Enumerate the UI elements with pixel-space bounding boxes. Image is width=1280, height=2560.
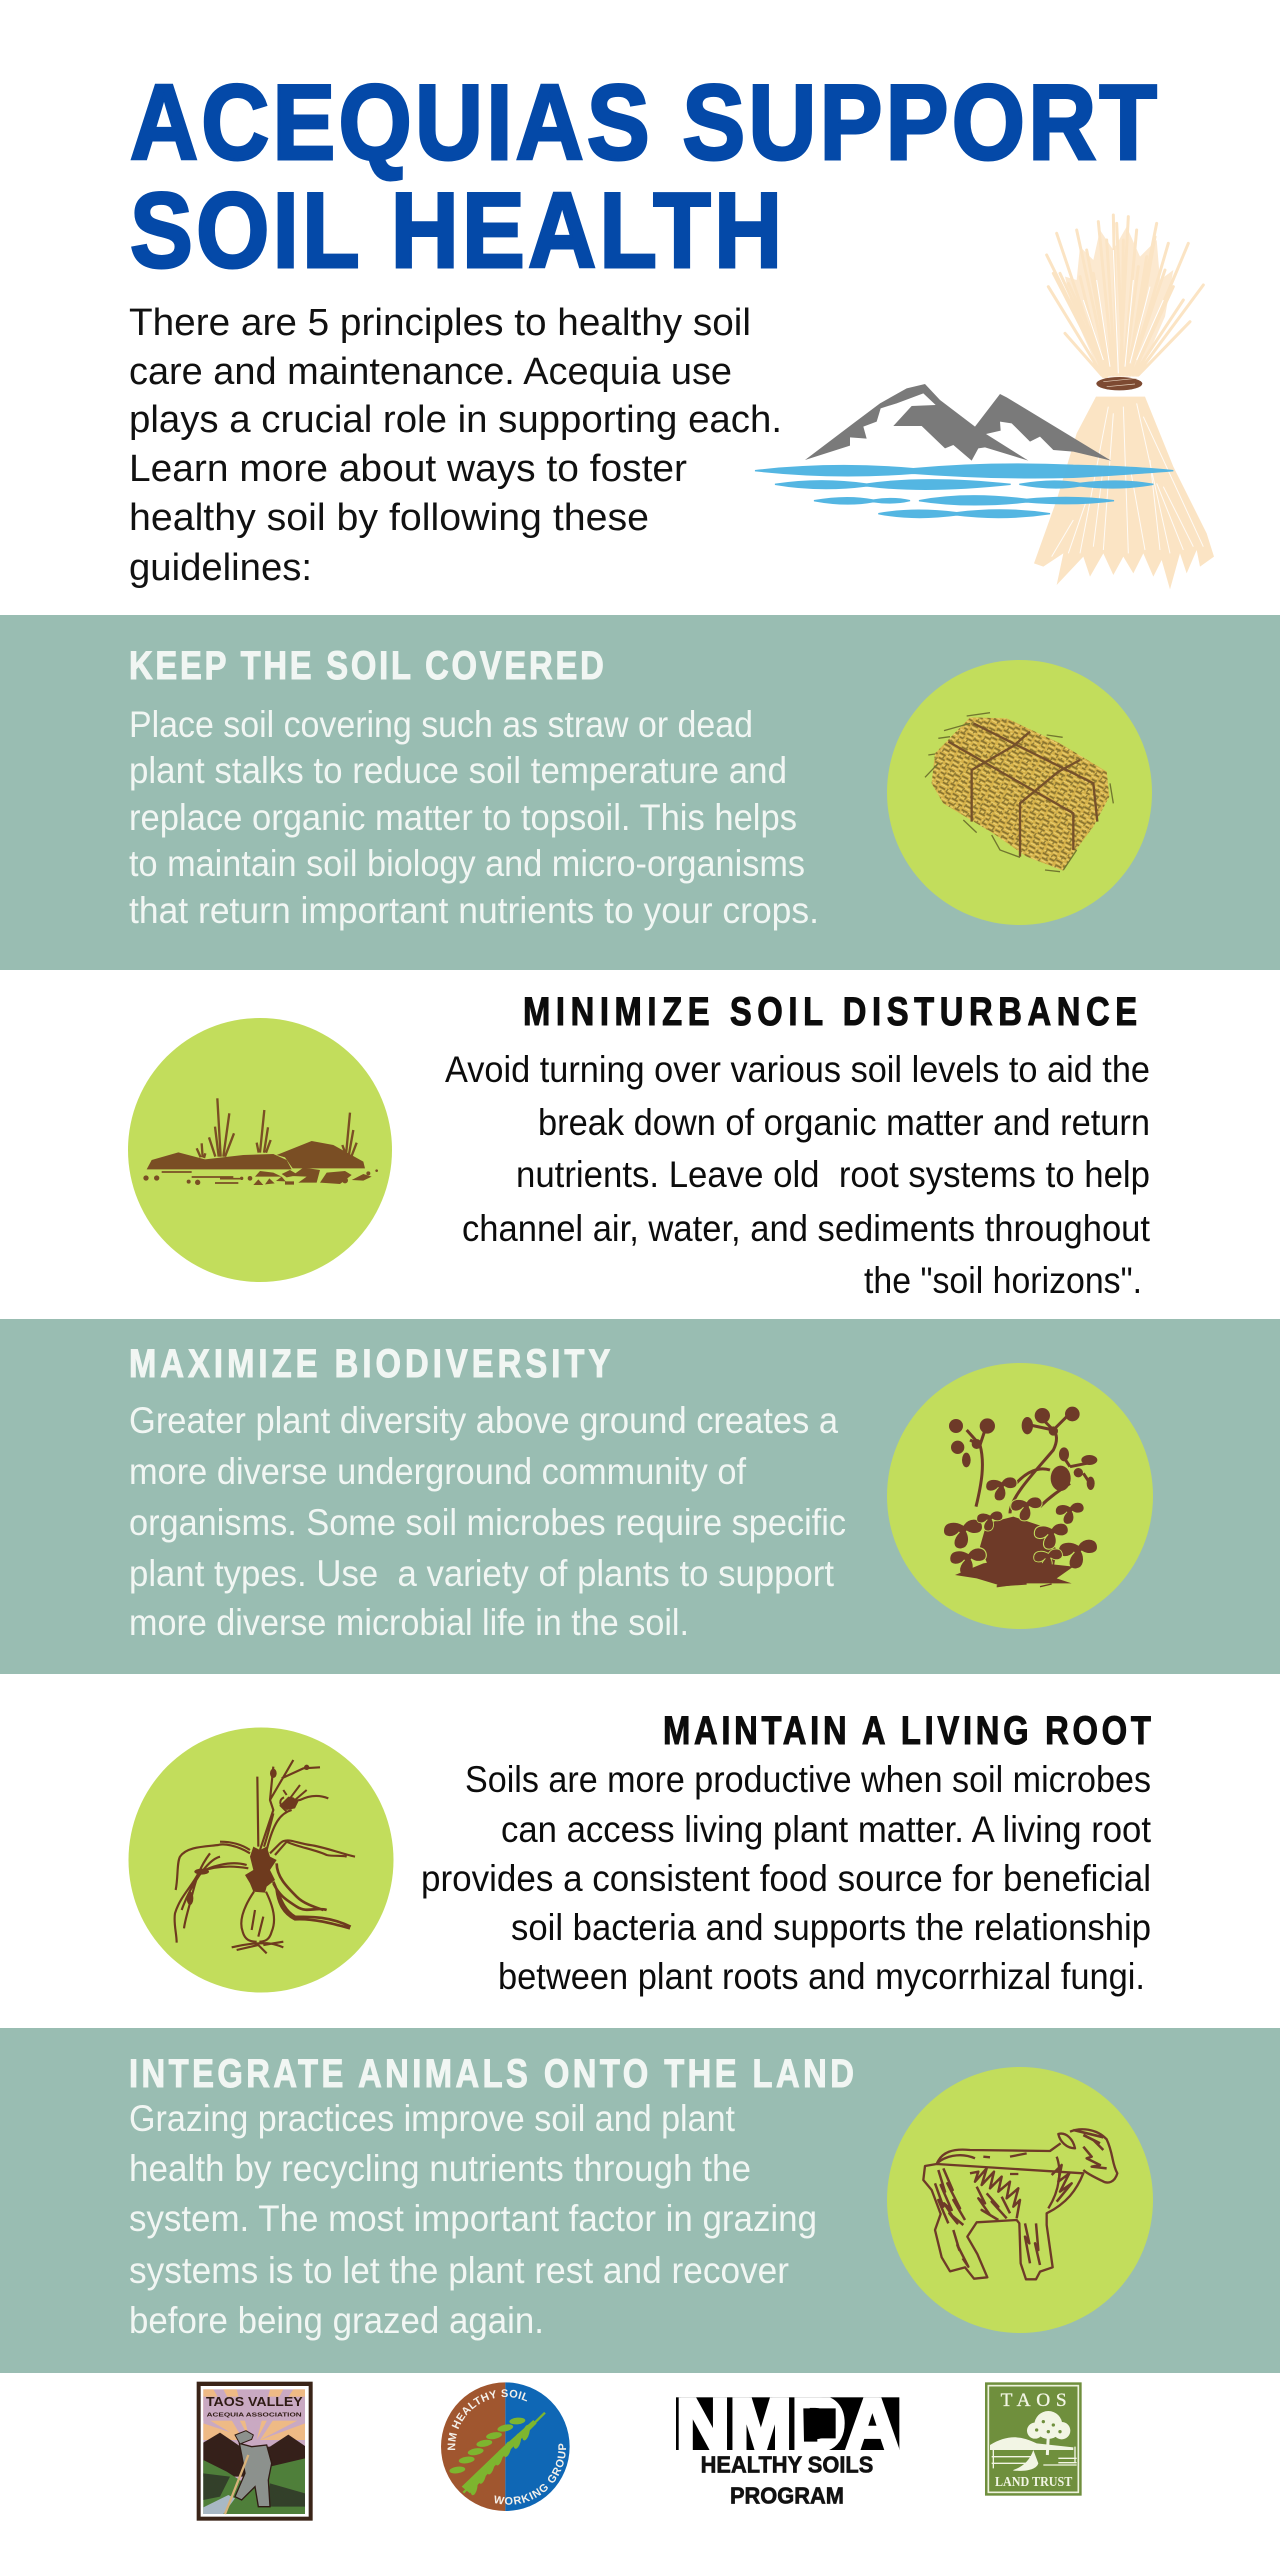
body text: the "soil horizons". [864,1260,1142,1301]
panel: keep the soil covered [0,615,1280,970]
logo: NMDA Healthy Soils Program: NMDA [676,2382,899,2467]
intro text: guidelines: [129,547,312,589]
body text: organisms. Some soil microbes require specific [129,1502,846,1543]
logo: Taos Valley Acequia Association: TAOS VALLEY [206,2394,303,2409]
panel: integrate animals onto the land [0,2028,1280,2373]
body text [129,2098,817,2341]
intro text: Learn more about ways to foster [129,448,687,490]
logo: NMDA Healthy Soils Program: PROGRAM [730,2482,844,2508]
body text: that return important nutrients to your crops. [129,890,819,931]
intro text [129,302,782,589]
icon: mountains [805,384,1111,461]
body text: health by recycling nutrients through the [129,2148,751,2189]
heading: KEEP THE SOIL COVERED [129,643,604,688]
body text: systems is to let the plant rest and recover [129,2250,789,2291]
body text: Avoid turning over various soil levels to aid the [445,1049,1150,1090]
icon: wheat sheaf [1034,215,1214,589]
body text: replace organic matter to topsoil. This helps [129,797,797,838]
body text: plant stalks to reduce soil temperature and [129,750,787,791]
icon: plant with root [128,1728,394,1992]
body text: Soils are more productive when soil microbes [465,1759,1151,1800]
heading: MINIMIZE SOIL DISTURBANCE [523,989,1137,1034]
icon: hay bale [887,660,1152,925]
body text: Grazing practices improve soil and plant [129,2098,736,2139]
panel: maintain a living root [0,1674,1280,2028]
heading: MAINTAIN A LIVING ROOT [663,1708,1151,1753]
logo: Taos Valley Acequia Association: ACEQUIA ASSOCIATION [207,2413,302,2419]
icon: sheep [887,2067,1153,2333]
body text: break down of organic matter and return [538,1102,1150,1143]
body text: system. The most important factor in grazing [129,2198,817,2239]
logo: Taos Valley Acequia Association [197,2382,313,2521]
body text: channel air, water, and sediments throughout [462,1208,1151,1249]
title: SOIL HEALTH [130,171,782,290]
intro text: care and maintenance. Acequia use [129,351,732,393]
body text: Place soil covering such as straw or dead [129,704,753,745]
illustration: wheat bundle, mountains and water [755,215,1214,589]
body text: before being grazed again. [129,2300,544,2341]
body text: can access living plant matter. A living root [501,1809,1152,1850]
body text: plant types. Use a variety of plants to support [129,1553,835,1594]
body text: more diverse underground community of [129,1451,747,1492]
intro text: There are 5 principles to healthy soil [129,302,751,344]
body text: nutrients. Leave old root systems to help [516,1154,1150,1195]
body text: between plant roots and mycorrhizal fungi. [498,1956,1145,1997]
logo: NM Healthy Soil Working Group: NM HEALTHY SOIL [448,2389,528,2450]
intro text: healthy soil by following these [129,497,649,539]
heading: INTEGRATE ANIMALS ONTO THE LAND [129,2051,854,2096]
intro text: plays a crucial role in supporting each. [129,399,782,441]
logo: NMDA Healthy Soils Program [676,2397,900,2504]
body text [129,1400,846,1643]
icon: clover [887,1363,1153,1629]
icon: string tie [1096,377,1142,390]
logo: NM Healthy Soil Working Group [441,2382,570,2511]
logo: Taos Land Trust [985,2382,1082,2496]
title [130,63,1157,290]
logo: NMDA Healthy Soils Program: HEALTHY SOILS [701,2452,873,2478]
panel: minimize soil disturbance [0,970,1280,1319]
logo: Taos Land Trust: TAOS [1001,2390,1067,2411]
body text: to maintain soil biology and micro-organisms [129,843,805,884]
body text [445,1049,1151,1301]
panel: maximize biodiversity [0,1319,1280,1674]
body text: Greater plant diversity above ground creates a [129,1400,838,1441]
body text: more diverse microbial life in the soil. [129,1602,689,1643]
icon: soil mounds [128,1018,392,1282]
heading: MAXIMIZE BIODIVERSITY [129,1341,610,1386]
title: ACEQUIAS SUPPORT [130,63,1157,182]
logo: NM Healthy Soil Working Group: WORKING GROUP [494,2444,566,2505]
body text: provides a consistent food source for beneficial [421,1858,1151,1899]
body text: soil bacteria and supports the relationship [511,1907,1151,1948]
logo: Taos Land Trust: LAND TRUST [995,2475,1073,2490]
footer logos [196,2382,1082,2521]
body text [129,704,819,931]
body text [421,1759,1152,1997]
icon: water [755,464,1173,518]
